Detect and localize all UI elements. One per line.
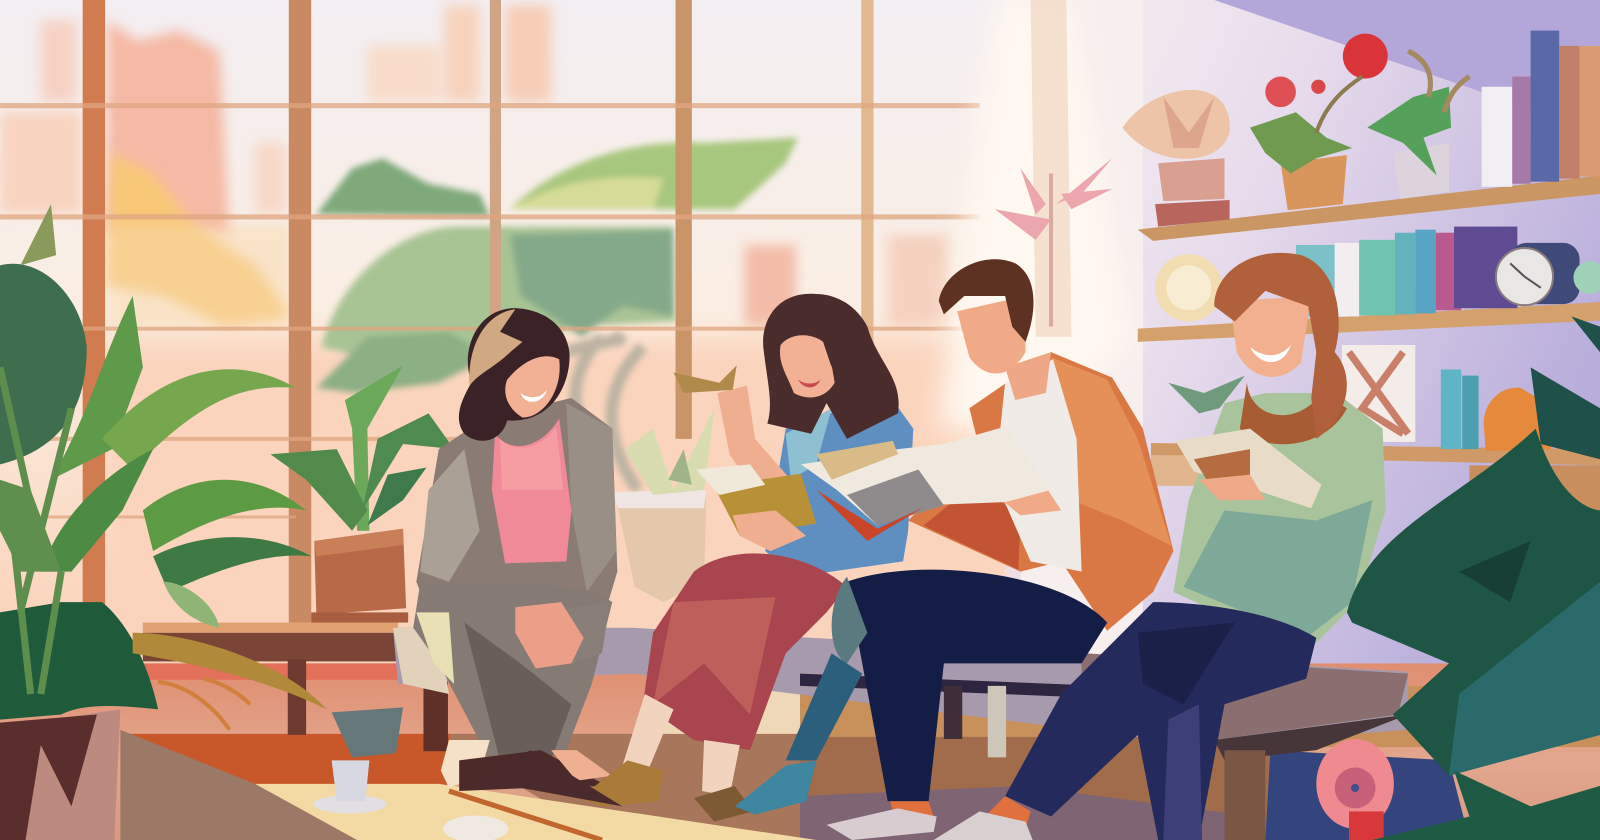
hand on book <box>733 510 806 551</box>
right monstera plant <box>1347 316 1600 840</box>
cardigan <box>416 398 617 623</box>
person: woman with pink top <box>413 308 617 791</box>
shoe <box>934 811 1033 840</box>
trousers <box>413 582 612 760</box>
neck scarf <box>1240 383 1347 444</box>
small plant behind shoulder <box>1168 376 1245 413</box>
shelf: top <box>1138 176 1600 241</box>
potted plant on table <box>270 365 454 623</box>
face <box>505 356 560 417</box>
left planter <box>0 709 120 840</box>
hands <box>515 602 584 669</box>
window frame: vertical mullions <box>83 0 873 633</box>
arm holding up <box>717 386 791 500</box>
pale flower pot <box>1122 90 1230 227</box>
shelf: lower <box>1151 443 1600 465</box>
rug near toy <box>1265 750 1469 840</box>
teal planter on floor <box>332 707 403 757</box>
yellow foliage <box>107 153 291 327</box>
person: man in orange hoodie <box>735 259 1173 840</box>
open book <box>717 474 816 536</box>
wall below window behind bench <box>0 663 1600 840</box>
cup and saucer on floor <box>313 760 508 840</box>
shoe <box>827 808 937 840</box>
top shelf plants <box>1122 34 1469 227</box>
wooden side table <box>143 623 448 751</box>
middle shelf books <box>1296 227 1517 316</box>
feet <box>441 740 490 788</box>
left palm plant <box>0 204 327 730</box>
face <box>780 335 835 397</box>
legs and shoes <box>622 694 673 771</box>
hair back <box>459 308 570 441</box>
neck <box>1005 352 1051 400</box>
hoodie <box>908 352 1173 631</box>
bench <box>393 628 1408 840</box>
window frame: horizontal mullions <box>0 103 980 518</box>
shadow under first reader <box>459 750 622 806</box>
window view <box>0 0 1005 674</box>
pink flower plant by the wall <box>995 158 1112 327</box>
icon: pale shelf clock <box>1155 254 1222 322</box>
red trousers <box>643 553 847 750</box>
floor boards <box>429 734 816 840</box>
low table plank <box>120 730 357 840</box>
red flower pot <box>1250 34 1388 210</box>
sunlight curtain glow <box>939 0 1133 439</box>
blond hair highlight <box>469 309 522 386</box>
green plant pot <box>1367 51 1469 199</box>
floor <box>0 663 1600 840</box>
orange floor patch <box>128 734 449 786</box>
wall background <box>980 0 1600 674</box>
ankle <box>890 801 934 825</box>
fringe <box>776 312 837 367</box>
shelves <box>1138 176 1600 598</box>
sunbeam <box>255 784 816 840</box>
hand and book <box>985 459 1061 515</box>
lower shelf picture and books <box>1342 345 1555 451</box>
hair back <box>763 294 899 439</box>
face <box>957 296 1026 373</box>
white pot plant behind reader <box>612 408 714 602</box>
ankle <box>985 796 1031 829</box>
pink top <box>492 418 571 563</box>
navy jeans <box>847 570 1107 801</box>
person: woman with blue top <box>580 294 913 822</box>
navy jeans <box>1005 602 1316 840</box>
blue lower leg <box>786 653 862 760</box>
hair <box>1214 253 1347 439</box>
icon: clock <box>1496 243 1600 305</box>
top shelf books <box>1482 31 1600 187</box>
books and objects on shelves <box>1155 31 1600 451</box>
shelf: middle <box>1138 302 1600 342</box>
sweater <box>1173 393 1386 653</box>
green tree canopy <box>316 138 798 490</box>
hair <box>939 259 1034 342</box>
person: woman in green sweater <box>934 253 1386 840</box>
book held up <box>673 365 737 393</box>
distant city buildings <box>0 5 949 327</box>
face <box>1230 296 1311 377</box>
white shirt <box>995 359 1082 572</box>
blue top <box>765 393 913 577</box>
lower window glow <box>102 337 1000 663</box>
pink toy on floor <box>1316 739 1394 840</box>
hand and book <box>1176 429 1321 508</box>
